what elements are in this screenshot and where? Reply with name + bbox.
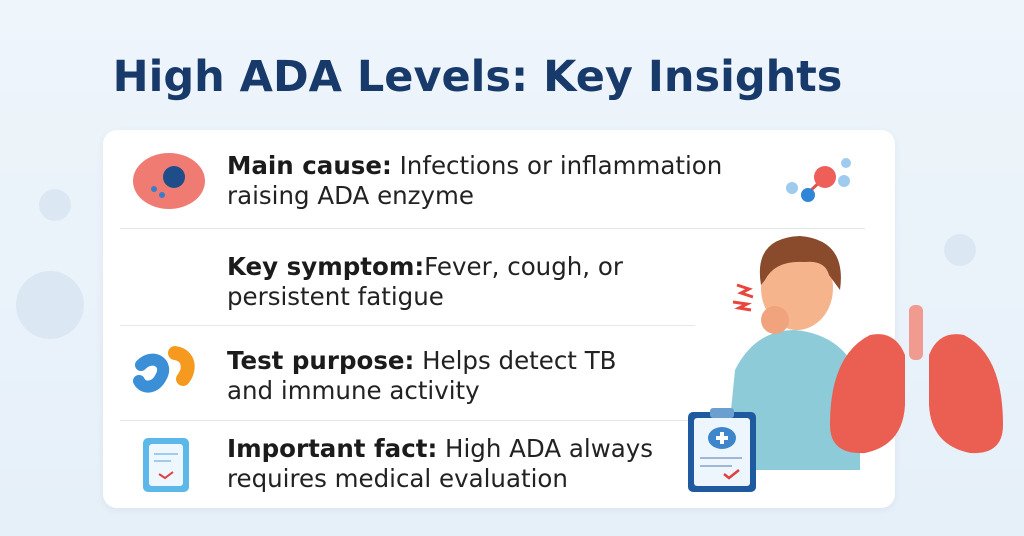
- text: important fact: [227, 434, 653, 493]
- panel: card: [103, 130, 895, 508]
- text: test purpose: [227, 346, 616, 405]
- background virus right: [944, 234, 976, 266]
- icon: report: [143, 438, 189, 492]
- illustration: coughing man: [731, 236, 860, 470]
- text: key symptom: persistent fatigue: [227, 282, 444, 311]
- text: main cause: raising ADA enzyme: [227, 181, 474, 210]
- text: important fact: requires medical evaluation: [227, 464, 568, 493]
- icon: virus: [133, 153, 205, 209]
- background virus left: [16, 189, 84, 339]
- text: test purpose: and immune activity: [227, 376, 480, 405]
- text: key symptom: Key symptom:Fever, cough, or: [227, 252, 623, 281]
- text: main cause: [227, 151, 722, 210]
- text: test purpose: Test purpose: Helps detect TB: [227, 346, 616, 375]
- title: High ADA Levels: Key Insights: [113, 52, 842, 102]
- icon: bacteria: [133, 346, 195, 393]
- text: main cause: Main cause: Infections or inflammation: [227, 151, 722, 180]
- text: key symptom: [227, 252, 623, 311]
- text: important fact: Important fact: High ADA always: [227, 434, 653, 463]
- icon: clipboard: [688, 408, 756, 492]
- icon: molecule: [786, 158, 851, 202]
- illustration: lungs: [830, 305, 1003, 454]
